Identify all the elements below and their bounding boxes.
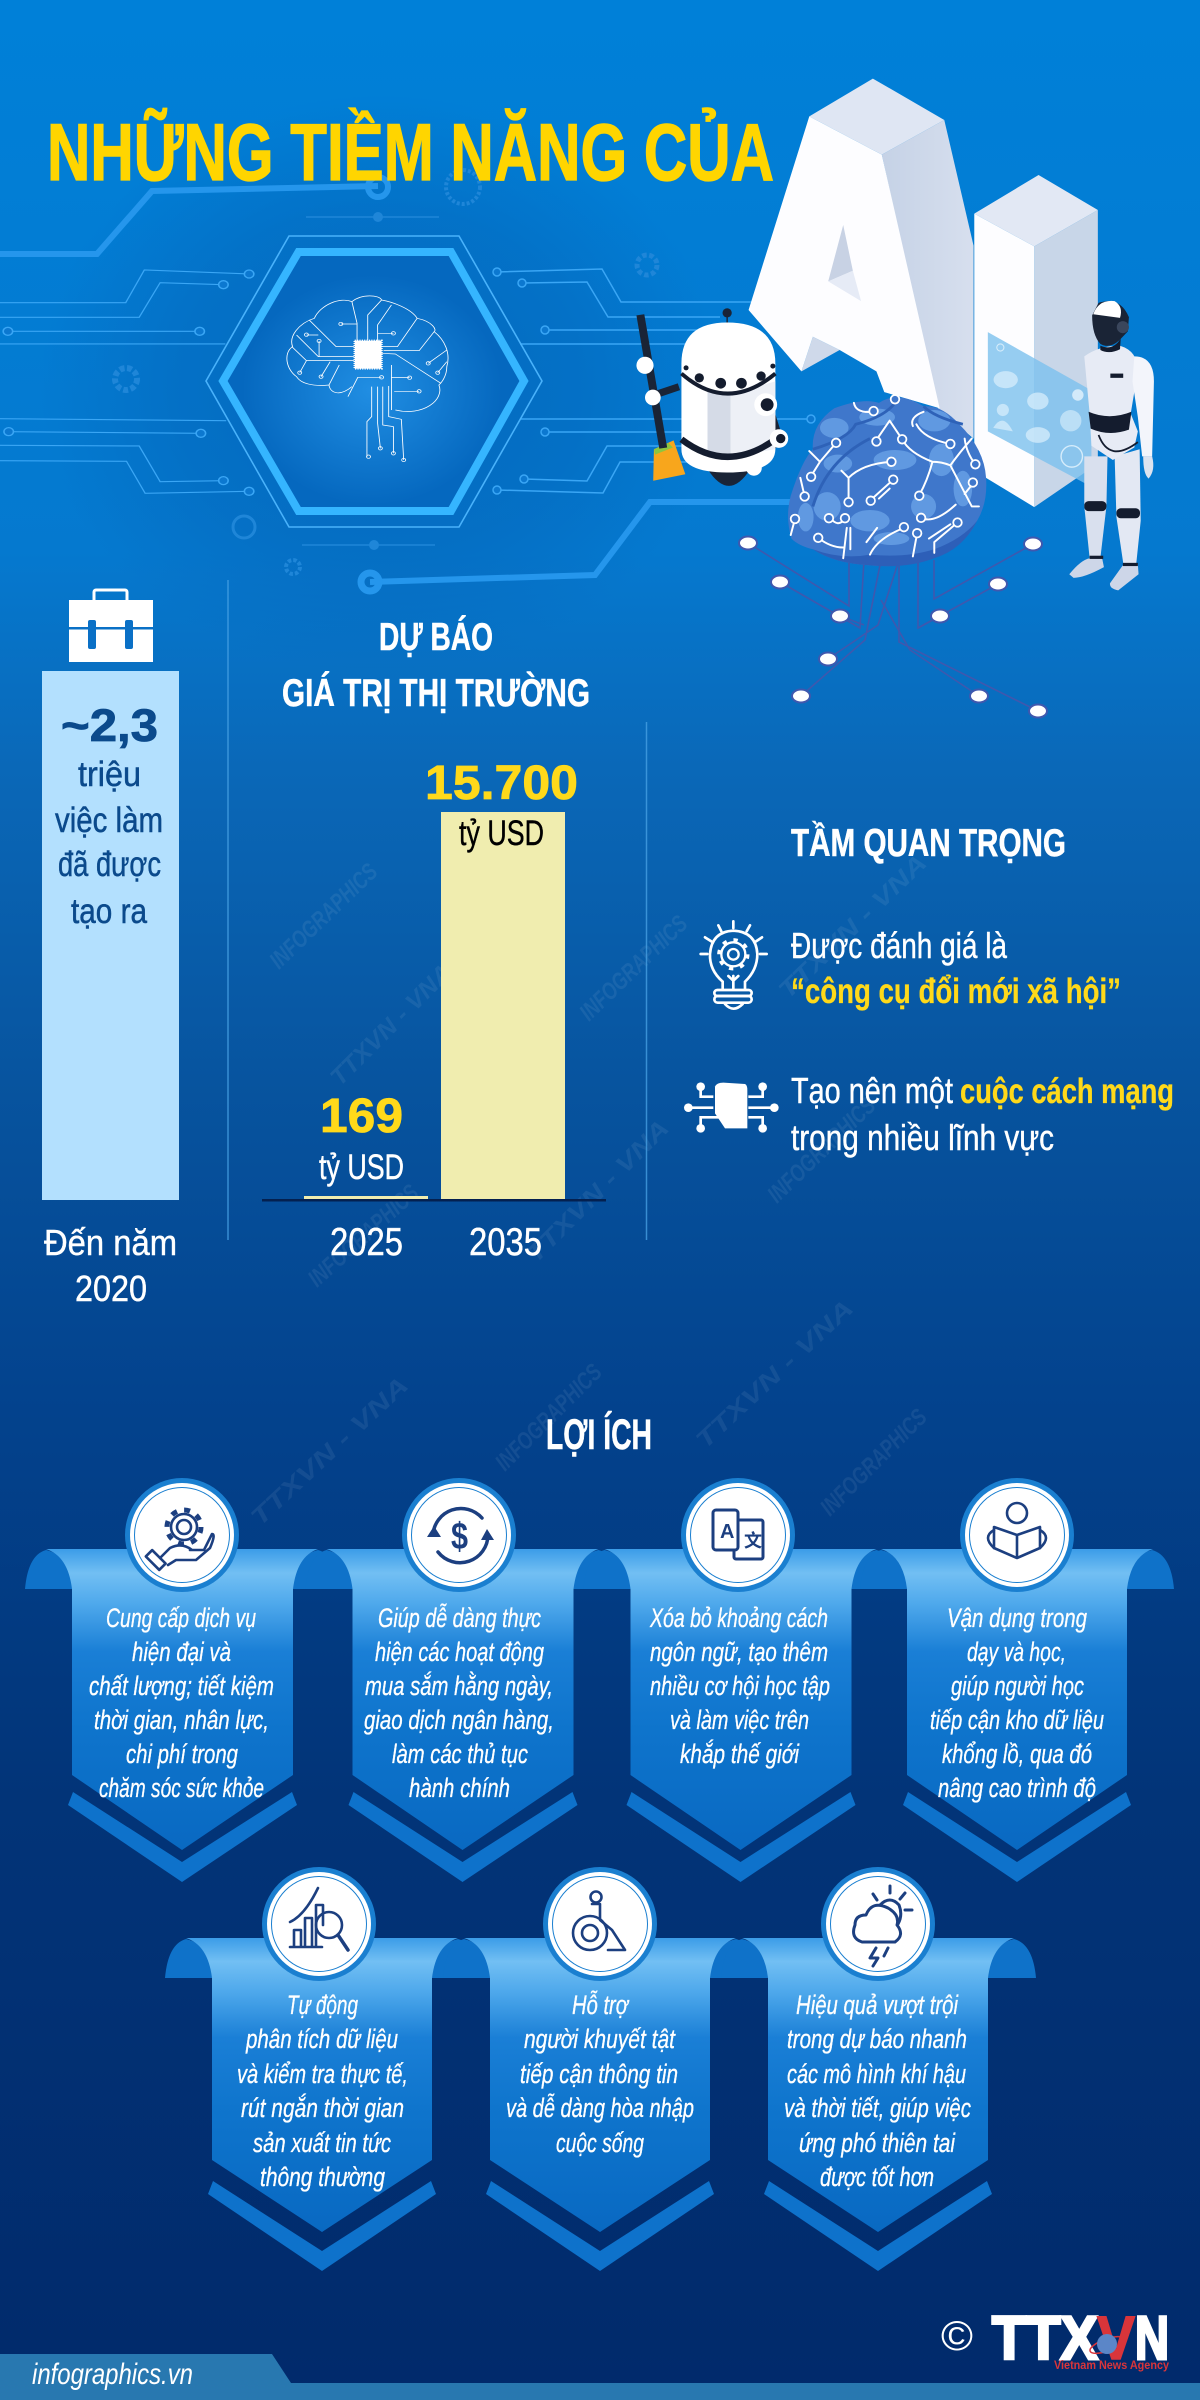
benefits heading: LỢI ÍCH: [546, 1411, 652, 1459]
benefit 5 text: [237, 1990, 408, 2192]
icon: hand with circuit: [684, 1082, 779, 1133]
logo: TTXVN: Vietnam News Agency: [1054, 2358, 1169, 2372]
icon: wheelchair: [573, 1892, 625, 1950]
importance text 1: “công cụ đổi mới xã hội”: [791, 972, 1121, 1011]
importance text 2: [791, 1070, 1174, 1158]
benefit 6 text: người khuyết tật: [524, 2024, 676, 2054]
icon: translation cards: 文: [744, 1527, 762, 1553]
benefit 3 text: và làm việc trên: [670, 1705, 809, 1735]
icon: dollar exchange: [427, 1508, 494, 1563]
benefit 1 text: thời gian, nhân lực,: [94, 1705, 269, 1735]
icon: light bulb with gear: [701, 921, 767, 1009]
icon: translation cards: [713, 1510, 763, 1559]
benefit 4 text: nâng cao trình độ: [938, 1773, 1096, 1803]
bar 2035: [441, 812, 565, 1200]
icon: circuit brain: [287, 296, 448, 462]
benefit 2 text: giao dịch ngân hàng,: [364, 1705, 554, 1735]
icon: cloud sun and lightning: [854, 1886, 912, 1966]
unit 2035: tỷ USD: [459, 814, 544, 853]
watermarks: INFOGRAPHICS: [264, 858, 383, 974]
watermarks: INFOGRAPHICS: [574, 910, 693, 1026]
large circuit brain: [788, 394, 986, 566]
axis line: [262, 1199, 606, 1202]
benefit 3 text: Xóa bỏ khoảng cách: [649, 1603, 828, 1633]
benefit 2 text: mua sắm hằng ngày,: [365, 1670, 553, 1701]
benefit 6 text: cuộc sống: [556, 2128, 644, 2158]
chart heading: GIÁ TRỊ THỊ TRƯỜNG: [282, 671, 590, 715]
copyright symbol: ©: [941, 2312, 973, 2359]
importance heading: TẦM QUAN TRỌNG: [791, 821, 1066, 865]
benefit 1 text: chất lượng; tiết kiệm: [89, 1671, 274, 1701]
icon: person reading: [988, 1503, 1046, 1558]
panel: benefit 6: [443, 1867, 758, 2271]
importance text 2: Tạo nên một: [791, 1070, 953, 1111]
benefit 5 text: phân tích dữ liệu: [245, 2024, 398, 2054]
watermarks: TTXVN - VNA: [521, 1115, 675, 1268]
divider lines: [228, 580, 646, 1240]
panel: benefit 4: [860, 1478, 1174, 1882]
benefit 1 text: Cung cấp dịch vụ: [106, 1603, 256, 1633]
watermarks: INFOGRAPHICS: [815, 1404, 933, 1521]
benefit 7 text: được tốt hơn: [820, 2162, 934, 2192]
icon: briefcase: [69, 590, 153, 662]
panel: market forecast chart: [262, 615, 606, 1264]
benefit 3 text: [649, 1603, 830, 1769]
jobs bar: [42, 671, 179, 1200]
panel: benefit 5: [165, 1867, 480, 2271]
benefit 6 text: Hỗ trợ: [572, 1989, 630, 2020]
benefit 7 text: và thời tiết, giúp việc: [784, 2093, 971, 2123]
jobs text: việc làm: [55, 801, 163, 840]
value 2025: 169: [320, 1090, 403, 1143]
circuit board traces: [0, 170, 815, 591]
benefit 2 text: hiện các hoạt động: [375, 1637, 544, 1667]
benefit 3 text: khắp thế giới: [680, 1738, 800, 1769]
watermarks: TTXVN - VNA: [773, 849, 932, 1004]
benefit 2 text: làm các thủ tục: [392, 1739, 528, 1769]
benefit 3 text: nhiều cơ hội học tập: [650, 1671, 830, 1701]
jobs text: đã được: [58, 845, 161, 884]
watermarks: [246, 849, 933, 1531]
benefit 1 text: chi phí trong: [126, 1739, 238, 1769]
chart heading: DỰ BÁO: [379, 615, 493, 659]
benefit 5 text: Tự động: [287, 1990, 358, 2020]
letter I: [974, 175, 1098, 507]
value 2035: 15.700: [425, 757, 578, 810]
importance text 1: [791, 925, 1121, 1011]
panel: benefit 3: [584, 1478, 898, 1882]
icon: translation cards: A: [720, 1521, 734, 1543]
benefit 2 text: Giúp dễ dàng thực: [378, 1602, 541, 1633]
benefit 7 text: [784, 1990, 971, 2192]
cleaning robot: [636, 308, 788, 486]
bar 2025: [304, 1196, 428, 1200]
icon: hand holding gear: [146, 1510, 214, 1570]
icon: dollar exchange: $: [451, 1516, 468, 1558]
brain connector lines and nodes: [739, 536, 1047, 717]
jobs figure: ~2,3: [61, 700, 158, 751]
benefit 5 text: rút ngắn thời gian: [241, 2092, 404, 2123]
chart heading: [282, 615, 590, 715]
benefit 1 text: chăm sóc sức khỏe: [99, 1773, 264, 1803]
unit 2025: tỷ USD: [319, 1148, 404, 1187]
jobs year label: Đến năm: [44, 1222, 177, 1263]
logo: TTXVN: N: [1135, 2304, 1169, 2372]
logo: TTXVN: V: [1097, 2304, 1135, 2372]
benefit 6 text: và dễ dàng hòa nhập: [506, 2092, 694, 2123]
year labels: 2025: [330, 1221, 403, 1264]
jobs text: triệu: [78, 755, 141, 794]
title: NHỮNG TIỀM NĂNG CỦA: [47, 107, 774, 198]
watermarks: INFOGRAPHICS: [490, 1359, 608, 1476]
logo: TTXVN: TTX: [992, 2304, 1098, 2372]
benefit 7 text: trong dự báo nhanh: [787, 2024, 967, 2054]
icon: chart with magnifier: [290, 1888, 348, 1950]
benefit 3 text: ngôn ngữ, tạo thêm: [650, 1637, 828, 1667]
year labels: [330, 1221, 542, 1264]
benefit 5 text: thông thường: [260, 2162, 385, 2192]
watermarks: TTXVN - VNA: [325, 959, 457, 1091]
watermarks: TTXVN - VNA: [691, 1295, 859, 1454]
hexagon backdrop shade: [40, 95, 720, 675]
hexagon with brain chip: [206, 236, 542, 527]
benefit 6 text: [506, 1989, 694, 2158]
jobs year label: [44, 1222, 177, 1309]
jobs text: tạo ra: [71, 892, 147, 931]
watermarks: TTXVN - VNA: [246, 1372, 414, 1531]
importance text 2: trong nhiều lĩnh vực: [791, 1117, 1054, 1158]
year labels: 2035: [469, 1221, 542, 1264]
benefit 2 text: [364, 1602, 554, 1803]
benefit 4 text: khổng lồ, qua đó: [942, 1739, 1092, 1769]
panel: benefit 2: [306, 1478, 620, 1882]
footer band with website tab: [0, 2354, 1200, 2400]
panel: jobs created: [42, 590, 179, 1309]
panel: benefit 1: [25, 1478, 340, 1882]
benefit 4 text: Vận dụng trong: [947, 1603, 1087, 1633]
logo: TTXVN: [992, 2304, 1169, 2372]
watermarks: INFOGRAPHICS: [762, 1092, 881, 1208]
jobs year label: 2020: [75, 1268, 147, 1309]
panel: benefit 7: [721, 1867, 1036, 2271]
benefit 5 text: sản xuất tin tức: [253, 2128, 391, 2158]
letter A: [749, 79, 974, 439]
benefit 7 text: ứng phó thiên tai: [799, 2128, 956, 2158]
benefit 1 text: hiện đại và: [132, 1637, 231, 1667]
benefit 4 text: dạy và học,: [967, 1637, 1066, 1667]
benefit 4 text: tiếp cận kho dữ liệu: [930, 1705, 1104, 1735]
benefit 4 text: [930, 1603, 1104, 1803]
benefit 6 text: tiếp cận thông tin: [520, 2059, 678, 2089]
benefit 7 text: Hiệu quả vượt trội: [796, 1990, 959, 2020]
illustration: AI letters, robots and brain: [636, 79, 1154, 717]
panel: importance: [684, 821, 1174, 1158]
jobs text: [55, 755, 163, 931]
importance text 1: Được đánh giá là: [791, 925, 1008, 966]
website label: infographics.vn: [32, 2358, 193, 2391]
benefit 4 text: giúp người học: [951, 1671, 1084, 1701]
benefit 5 text: và kiểm tra thực tế,: [237, 2059, 408, 2089]
watermarks: INFOGRAPHICS: [303, 1179, 424, 1292]
humanoid robot: [1069, 301, 1154, 590]
benefit 1 text: [89, 1603, 274, 1803]
holographic screen: [988, 332, 1091, 487]
benefit 2 text: hành chính: [409, 1773, 510, 1803]
benefit 7 text: các mô hình khí hậu: [787, 2059, 966, 2089]
